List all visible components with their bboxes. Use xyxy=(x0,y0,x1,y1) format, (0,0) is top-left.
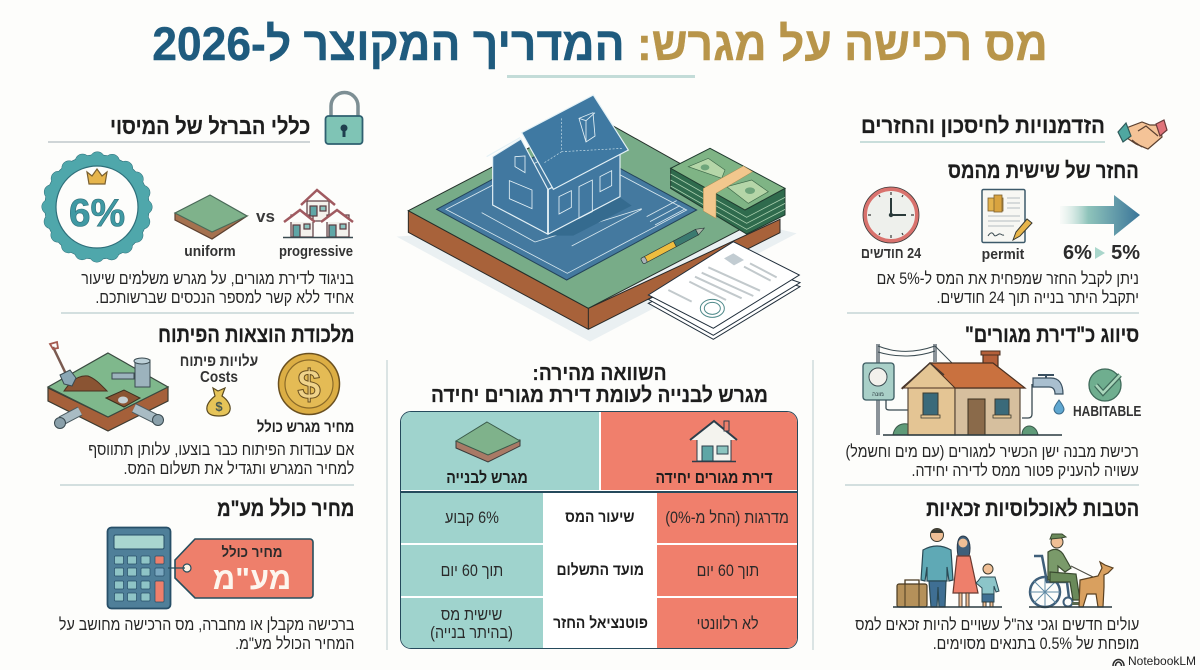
text: refund explanation: יתקבל היתר בנייה תוך 24 חודשים. xyxy=(937,288,1139,306)
icon: money bag: $ xyxy=(215,399,223,414)
row title: שיעור המס xyxy=(565,509,635,526)
icon: multiple houses xyxy=(283,188,354,238)
text: eligible populations explanation: מופחת של 0.5% בתנאים מסוימים. xyxy=(932,634,1139,652)
text: VAT explanation xyxy=(58,616,354,652)
text: uniform rate explanation: אחיד ללא קשר למספר הנכסים שברשותכם. xyxy=(96,288,354,306)
icon: gold coin xyxy=(278,352,340,416)
label: permit: permit xyxy=(982,246,1024,263)
icon: money bag xyxy=(206,386,231,417)
comparison heading xyxy=(431,361,768,407)
label: דירת מגורים יחידה xyxy=(655,469,773,487)
icon: gradient arrow xyxy=(1062,195,1140,236)
icon: 6% badge: 6% xyxy=(69,192,125,235)
text: VAT explanation: המחיר הכולל מע"מ. xyxy=(235,634,354,652)
label: progressive: progressive xyxy=(279,243,353,260)
text: eligible populations explanation: עולים חדשים וגכי צה"ל עשויים להיות זכאים למס xyxy=(855,616,1139,634)
text: habitable explanation: רכישת מבנה ישן הכשיר למגורים (עם מים וחשמל) xyxy=(846,443,1139,461)
label: development costs: עלויות פיתוח xyxy=(180,353,258,370)
icon: building permit document xyxy=(981,188,1033,244)
vs label: vs xyxy=(256,207,275,226)
icon: clock xyxy=(862,186,920,244)
text: uniform rate explanation: בניגוד לדירת מגורים, על מגרש משלמים שיעור xyxy=(81,270,354,288)
icon: old house with utilities: מונה xyxy=(872,392,884,398)
icon: brand arcs xyxy=(1112,658,1125,666)
icon: price tag xyxy=(168,538,314,599)
row: tax rate xyxy=(401,493,797,543)
heading: price including VAT: מחיר כולל מע"מ xyxy=(217,496,354,521)
heading: savings and refund opportunities: הזדמנויות לחיסכון והחזרים xyxy=(861,113,1105,138)
brand mark: NotebookLM xyxy=(1112,654,1196,668)
value: 5%: 5% xyxy=(1111,242,1140,264)
plot value xyxy=(401,598,543,649)
text: eligible populations explanation xyxy=(855,616,1139,652)
text: development explanation: אם עבודות הפיתוח כבר בוצעו, עלותן תתווסף xyxy=(88,441,354,459)
icon: development works plot xyxy=(46,340,170,432)
text: uniform rate explanation xyxy=(81,270,354,306)
icon: uniform plot of land xyxy=(174,194,249,240)
row title: מועד התשלום xyxy=(556,562,644,578)
text: VAT explanation: ברכישה מקבלן או מחברה, מס הרכישה מחושב על xyxy=(58,616,354,634)
comparison heading: השוואה מהירה: xyxy=(532,361,667,385)
panel: savings and refunds (right column) xyxy=(845,113,1168,652)
plot value: שישית מס xyxy=(441,606,503,624)
icon: green check mark xyxy=(1088,368,1122,402)
plot value: תוך 60 יום xyxy=(441,562,503,580)
residence value: מדרגות (החל מ-0%) xyxy=(666,509,789,527)
icon: handshake xyxy=(1117,119,1168,150)
icon: small triangle xyxy=(1095,247,1105,259)
residence value: לא רלוונטי xyxy=(696,614,759,632)
text: refund explanation xyxy=(877,270,1139,306)
panel: centre illustration and comparison xyxy=(386,94,814,650)
residence value xyxy=(657,598,798,649)
label: total plot price: מחיר מגרש כולל xyxy=(257,419,354,436)
plot value: (בהיתר בנייה) xyxy=(431,624,513,642)
title underline xyxy=(507,75,695,78)
icon: water tap xyxy=(1032,374,1064,414)
text: refund explanation: ניתן לקבל החזר שמפחית את המס ל-5% אם xyxy=(877,270,1139,288)
row title: פוטנציאל החזר xyxy=(553,614,647,632)
plot value: 6% קבוע xyxy=(445,509,499,527)
row title xyxy=(543,545,657,596)
plot value xyxy=(401,493,543,543)
label: 6% to 5% xyxy=(1063,242,1140,264)
label: 24 months: 24 חודשים xyxy=(861,246,921,262)
title: מס רכישה על מגרש: המדריך המקוצר ל-2026 xyxy=(152,17,1048,70)
tag label: מחיר כולל xyxy=(222,545,282,561)
heading: iron rules: כללי הברזל של המיסוי xyxy=(110,113,310,139)
label: development costs xyxy=(180,353,258,386)
panel: iron rules (left column) xyxy=(42,90,364,652)
table header: single residence xyxy=(601,412,798,490)
icon: old house with utilities xyxy=(862,344,1062,436)
row title xyxy=(543,493,657,543)
illustration: blueprint house on a plot with cash and contract xyxy=(397,94,801,342)
icon: plot xyxy=(455,421,521,462)
label: habitable: HABITABLE xyxy=(1073,403,1141,420)
text: development explanation xyxy=(88,441,354,478)
residence value: תוך 60 יום xyxy=(696,562,759,580)
text: habitable explanation xyxy=(846,443,1139,480)
heading: one-sixth refund: החזר של שישית מהמס xyxy=(948,158,1139,183)
text: habitable explanation: עשויה להעניק פטור ממס לדירה יחידה. xyxy=(912,462,1139,480)
row: refund potential xyxy=(401,598,797,648)
heading: residence classification: סיווג כ"דירת מגורים" xyxy=(965,322,1139,347)
heading: eligible populations: הטבות לאוכלוסיות זכאיות xyxy=(926,496,1139,521)
comparison table xyxy=(400,411,798,649)
icon: calculator xyxy=(106,526,172,610)
heading: development cost trap: מלכודת הוצאות הפיתוח xyxy=(158,322,354,347)
brand text: NotebookLM xyxy=(1128,654,1196,668)
plot value xyxy=(401,545,543,596)
icon: house xyxy=(689,420,738,462)
text: development explanation: למחיר המגרש ותגדיל את תשלום המס. xyxy=(123,460,354,478)
value: 6%: 6% xyxy=(1063,242,1092,264)
row: payment deadline xyxy=(401,545,797,596)
label: development costs: Costs xyxy=(200,369,238,386)
comparison heading: מגרש לבנייה לעומת דירת מגורים יחידה xyxy=(431,383,768,407)
table header: plot for building xyxy=(401,412,599,490)
residence value xyxy=(657,545,798,596)
row title xyxy=(543,598,657,649)
icon: padlock xyxy=(324,90,364,145)
label: מגרש לבנייה xyxy=(446,469,528,487)
icon: 6% badge xyxy=(42,152,152,262)
tag value: מע"מ xyxy=(213,561,291,596)
label: uniform: uniform xyxy=(184,243,236,260)
residence value xyxy=(657,493,798,543)
icon: disabled veteran in wheelchair with dog xyxy=(1028,534,1114,608)
icon: immigrant family xyxy=(893,528,1002,608)
icon: gold coin: $ xyxy=(297,361,321,408)
